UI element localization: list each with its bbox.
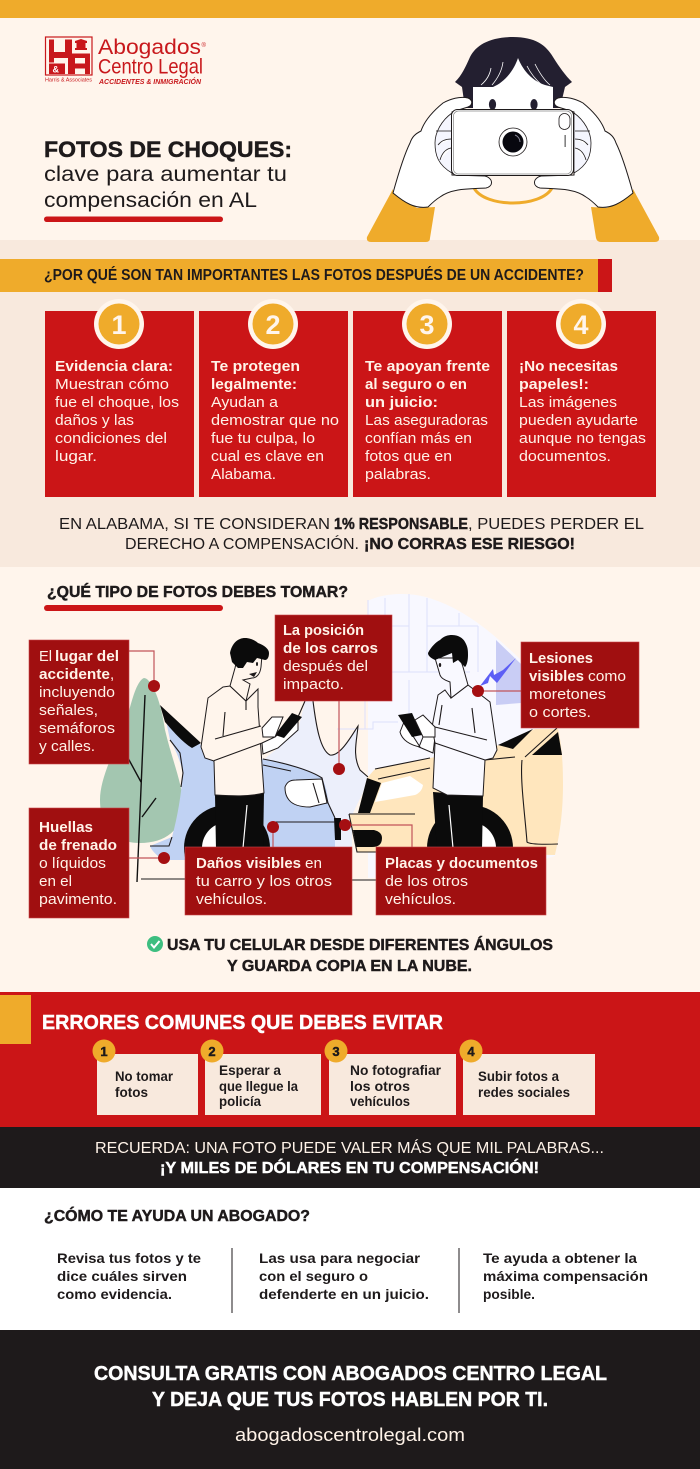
column two: defenderte en un juicio.: [259, 1286, 429, 1302]
phone flash: [559, 114, 570, 130]
error card 1: 1: [100, 1044, 108, 1059]
title: [44, 137, 292, 222]
right person arm lines: [435, 705, 487, 760]
dot: lesiones: [472, 685, 484, 697]
section heading band: [0, 259, 612, 292]
left person arm lines: [213, 701, 262, 761]
callout: lesiones visibles: visibles: [529, 668, 584, 685]
error card 2: que llegue la: [219, 1079, 298, 1094]
card 2 text: Alabama.: [211, 466, 276, 483]
card 2 badge: [248, 299, 298, 349]
cream grille: [353, 830, 382, 847]
cream car window: [532, 732, 562, 755]
pale mound: [263, 701, 370, 878]
callout: posicion de los carros: [275, 615, 392, 701]
error card 3: No fotografiar: [350, 1063, 442, 1078]
heading underline: [44, 605, 223, 611]
card 3 text: un juicio:: [365, 394, 438, 411]
error card 2: [200, 1040, 321, 1115]
callout: lugar del accidente: lugar del: [55, 648, 119, 665]
background blob: [368, 594, 563, 878]
callout: lugar del accidente: y calles.: [39, 738, 95, 755]
error card 4: [460, 1040, 595, 1115]
logo name second line: Centro Legal: [98, 56, 203, 78]
callout: placas y documentos: Placas y documentos: [385, 855, 538, 872]
left person sleeve: [213, 726, 262, 761]
blue car wheel: [184, 805, 270, 891]
left person mouth: [249, 672, 257, 677]
left hand: [393, 97, 492, 207]
right person hair: [428, 635, 468, 667]
tip line one: USA TU CELULAR DESDE DIFERENTES ÁNGULOS: [167, 937, 553, 954]
callout: huellas de frenado: o líquidos: [39, 855, 106, 872]
subtitle line two: compensación en AL: [44, 188, 257, 212]
error card 2: policía: [219, 1094, 261, 1109]
callout: posicion de los carros: de los carros: [283, 640, 378, 657]
panel: why section background: [0, 240, 700, 567]
error card 2: 2: [208, 1044, 216, 1059]
dot: lugar: [148, 680, 160, 692]
card 4 text: ¡No necesitas: [519, 358, 618, 375]
left person phone: [275, 713, 302, 738]
card 4: [507, 299, 656, 497]
right person torso: [432, 685, 497, 796]
illustration: person taking a photo: [367, 37, 659, 242]
orange square: [0, 995, 31, 1044]
callout: placas y documentos: vehículos.: [385, 891, 456, 908]
left person pants: [215, 793, 264, 850]
logo tagline: ACCIDENTES & INMIGRACIÓN: [98, 77, 202, 86]
warning text: , PUEDES PERDER EL: [468, 516, 644, 533]
cream hubcap: [444, 822, 496, 874]
card 4 badge: [556, 299, 606, 349]
card 4 text: Las imágenes: [519, 394, 617, 411]
phone button: [564, 135, 566, 147]
errors background: [0, 992, 700, 1127]
blue car lines: [150, 740, 335, 846]
cream car light: [358, 778, 381, 813]
mound outline: [298, 701, 368, 777]
callout: danos visibles: Daños visibles: [196, 855, 301, 872]
connector lines: [129, 651, 521, 864]
lawyer heading: ¿CÓMO TE AYUDA UN ABOGADO?: [44, 1207, 310, 1225]
callout: lesiones visibles: Lesiones: [529, 650, 593, 667]
blue car headlight: [285, 779, 327, 807]
orange band: [0, 259, 598, 292]
right sleeve: [591, 189, 659, 242]
errors heading: ERRORES COMUNES QUE DEBES EVITAR: [42, 1011, 443, 1034]
card 1 text: Evidencia clara:: [55, 358, 173, 375]
callout: placas y documentos: [376, 847, 546, 915]
column three: Te ayuda a obtener la: [483, 1250, 637, 1266]
error card 1: [92, 1040, 198, 1115]
card 4 badge: 4: [573, 310, 589, 340]
card 4 text: pueden ayudarte: [519, 412, 638, 429]
card 3: [353, 299, 502, 497]
error card 3: vehículos: [350, 1094, 410, 1109]
card 1 text: Muestran cómo: [55, 376, 169, 393]
cream windshield: [498, 729, 533, 749]
cream car lines: [349, 728, 558, 852]
callout: lesiones visibles: como: [588, 668, 626, 685]
hair strands: [481, 62, 550, 85]
dot: huellas: [158, 852, 170, 864]
footer background: [0, 1330, 700, 1469]
left person torso: [201, 686, 264, 796]
right person eye: [439, 663, 441, 667]
column two: [259, 1250, 429, 1302]
card 3 text: Las aseguradoras: [365, 412, 488, 429]
callout: posicion de los carros: La posición: [283, 622, 364, 639]
left person leg line: [243, 805, 247, 848]
card 1: [45, 299, 194, 497]
column three: máxima compensación: [483, 1268, 648, 1284]
card 2 text: legalmente:: [211, 376, 297, 393]
card 3 text: Te apoyan frente: [365, 358, 490, 375]
card 4 text: aunque no tengas: [519, 430, 646, 447]
left person hand back: [262, 717, 298, 754]
purple window: [496, 640, 521, 705]
title bold line: FOTOS DE CHOQUES:: [44, 137, 292, 162]
warning text: DERECHO A COMPENSACIÓN.: [125, 534, 359, 553]
right fingers: [574, 113, 591, 173]
error card 1: fotos: [115, 1085, 148, 1100]
tree trunk: [128, 695, 156, 882]
callout: lesiones visibles: moretones: [529, 686, 606, 703]
error card 4: Subir fotos a: [478, 1069, 559, 1084]
banner line one: RECUERDA: UNA FOTO PUEDE VALER MÁS QUE MIL PALABRAS...: [95, 1138, 604, 1157]
cream car headlight: [375, 776, 423, 802]
right person hand: [415, 715, 435, 737]
logo small print: Harris & Associates: [45, 78, 92, 84]
tip with check icon: [147, 936, 553, 975]
card 3 text: al seguro o en: [365, 376, 467, 393]
card 1 panel: [45, 311, 194, 497]
callout: danos visibles: tu carro y los otros: [196, 873, 332, 890]
callout: lugar del accidente: accidente: [39, 666, 110, 683]
card 2 text: Ayudan a: [211, 394, 279, 411]
cream car wheel: [427, 805, 513, 891]
callout: huellas de frenado: de frenado: [39, 837, 117, 854]
column one: Revisa tus fotos y te: [57, 1250, 201, 1266]
panel: errores comunes: [0, 992, 700, 1127]
left sleeve: [367, 189, 435, 242]
column three: posible.: [483, 1286, 535, 1302]
card 2 text: cual es clave en: [211, 448, 324, 465]
card 3 text: confían más en: [365, 430, 472, 447]
right person neck and face: [435, 658, 468, 698]
column one: como evidencia.: [57, 1286, 172, 1302]
callout: lesiones visibles: o cortes.: [529, 704, 591, 721]
camera lens: [499, 128, 527, 156]
banner background: [0, 1127, 700, 1188]
card 3 text: palabras.: [365, 466, 431, 483]
face: [473, 58, 553, 112]
eye right: [530, 99, 538, 110]
warning text: 1% RESPONSABLE: [334, 516, 468, 533]
dot: posicion: [333, 763, 345, 775]
callout: danos visibles: vehículos.: [196, 891, 267, 908]
left person neck and face: [230, 655, 262, 701]
logo mark: &: [52, 64, 60, 74]
callout: lugar del accidente: El: [39, 648, 52, 665]
card 2 badge: 2: [265, 310, 281, 340]
photo types heading: [44, 582, 348, 611]
callout: danos visibles: [185, 847, 352, 915]
lens core: [502, 132, 524, 152]
card 2 text: demostrar que no: [211, 412, 339, 429]
right person pants: [433, 792, 483, 850]
column three: [483, 1250, 648, 1302]
panel: como te ayuda un abogado: [0, 1188, 700, 1330]
footer line two: Y DEJA QUE TUS FOTOS HABLEN POR TI.: [152, 1389, 548, 1411]
logo mark: [46, 37, 92, 75]
callout: lugar del accidente: ,: [110, 666, 114, 683]
left fingers: [435, 113, 452, 173]
card 1 text: fue el choque, los: [55, 394, 179, 411]
warning text: [59, 516, 644, 553]
callout: huellas de frenado: en el: [39, 873, 72, 890]
card 1 badge: 1: [111, 310, 127, 340]
column one: dice cuáles sirven: [57, 1268, 187, 1284]
card 1 text: [55, 358, 179, 465]
card 1 text: daños y las: [55, 412, 134, 429]
error card 1: No tomar: [115, 1069, 174, 1084]
eye left: [489, 99, 496, 110]
card 4 panel: [507, 311, 656, 497]
card 4 text: [519, 358, 646, 465]
top accent bar: [0, 0, 700, 18]
left person eye: [256, 662, 258, 666]
footer line one: CONSULTA GRATIS CON ABOGADOS CENTRO LEGAL: [94, 1363, 607, 1385]
card 2: [199, 299, 348, 497]
card 4 text: documentos.: [519, 448, 611, 465]
card 2 text: fue tu culpa, lo: [211, 430, 315, 447]
error card 3: [324, 1040, 456, 1115]
card 3 badge: [402, 299, 452, 349]
lens glare: [515, 135, 520, 142]
red band end: [598, 259, 612, 292]
hair: [455, 37, 572, 108]
callout: lugar del accidente: señales,: [39, 702, 98, 719]
left person: [201, 638, 302, 850]
subtitle line one: clave para aumentar tu: [44, 162, 287, 186]
column one: [57, 1250, 201, 1302]
blue car windshield: [160, 705, 201, 748]
logo registered mark: ®: [202, 42, 206, 49]
lawyer background: [0, 1188, 700, 1330]
logo: [45, 36, 206, 86]
warning text: ¡NO CORRAS ESE RIESGO!: [364, 536, 575, 553]
card 1 badge: [94, 299, 144, 349]
tree crown: [100, 678, 183, 843]
column two: con el seguro o: [259, 1268, 368, 1284]
panel: footer call to action: [0, 1330, 700, 1469]
card 4 text: papeles!:: [519, 376, 589, 393]
column two: Las usa para negociar: [259, 1250, 421, 1266]
ground lines: [141, 879, 376, 880]
left person hand front: [262, 717, 283, 737]
dot: placas: [339, 819, 351, 831]
cream car body: [349, 729, 563, 855]
callout: posicion de los carros: después del: [283, 658, 368, 675]
right person leg line: [449, 805, 453, 848]
left person hair: [230, 638, 269, 668]
illustration: two people and cars: [100, 594, 563, 891]
callout: huellas de frenado: Huellas: [39, 819, 93, 836]
callout: huellas de frenado: pavimento.: [39, 891, 117, 908]
card 1 text: condiciones del: [55, 430, 167, 447]
card 3 text: [365, 358, 490, 483]
blue car bumper: [334, 818, 341, 840]
callout: huellas de frenado: [29, 808, 129, 918]
heading text: ¿QUÉ TIPO DE FOTOS DEBES TOMAR?: [47, 582, 348, 601]
card 3 panel: [353, 311, 502, 497]
banner line two: ¡Y MILES DE DÓLARES EN TU COMPENSACIÓN!: [160, 1158, 539, 1177]
callout: posicion de los carros: impacto.: [283, 676, 344, 693]
blue car: [150, 716, 335, 860]
card 2 text: Te protegen: [211, 358, 300, 375]
icon: check: [147, 936, 163, 952]
lightning icon: [480, 658, 516, 686]
error card 4: 4: [467, 1044, 475, 1059]
callout: lesiones visibles: [521, 642, 639, 728]
warning text: EN ALABAMA, SI TE CONSIDERAN: [59, 516, 330, 533]
footer website: abogadoscentrolegal.com: [235, 1425, 465, 1445]
callout: placas y documentos: de los otros: [385, 873, 468, 890]
right person forearm: [419, 737, 435, 753]
card 2 panel: [199, 311, 348, 497]
callout: lugar del accidente: semáforos: [39, 720, 115, 737]
error card 3: los otros: [350, 1079, 410, 1094]
band text: ¿POR QUÉ SON TAN IMPORTANTES LAS FOTOS DESPUÉS DE UN ACCIDENTE?: [44, 267, 584, 284]
callout: lugar del accidente: incluyendo: [39, 684, 115, 701]
error card 3: 3: [332, 1044, 340, 1059]
phone: [452, 110, 574, 176]
collar: [474, 188, 552, 203]
blue car hubcap: [202, 822, 254, 874]
error card 2: Esperar a: [219, 1063, 281, 1078]
card 1 text: lugar.: [55, 448, 97, 465]
callout: lugar del accidente: [29, 640, 129, 764]
right person phone: [398, 713, 422, 737]
dot: danos: [267, 821, 279, 833]
card 3 badge: 3: [419, 310, 435, 340]
column dividers: [232, 1248, 459, 1313]
panel: recuerda banner: [0, 1127, 700, 1188]
title underline: [44, 216, 223, 222]
logo name: Abogados: [98, 36, 201, 59]
card 2 text: [211, 358, 339, 483]
right person: [398, 635, 497, 850]
callout: danos visibles: en: [305, 855, 322, 872]
error card 4: redes sociales: [478, 1085, 570, 1100]
card 3 text: fotos que en: [365, 448, 452, 465]
building grid: [337, 594, 478, 729]
right hand: [534, 97, 633, 207]
tip line two: Y GUARDA COPIA EN LA NUBE.: [227, 958, 472, 975]
right person back hand: [400, 722, 420, 747]
